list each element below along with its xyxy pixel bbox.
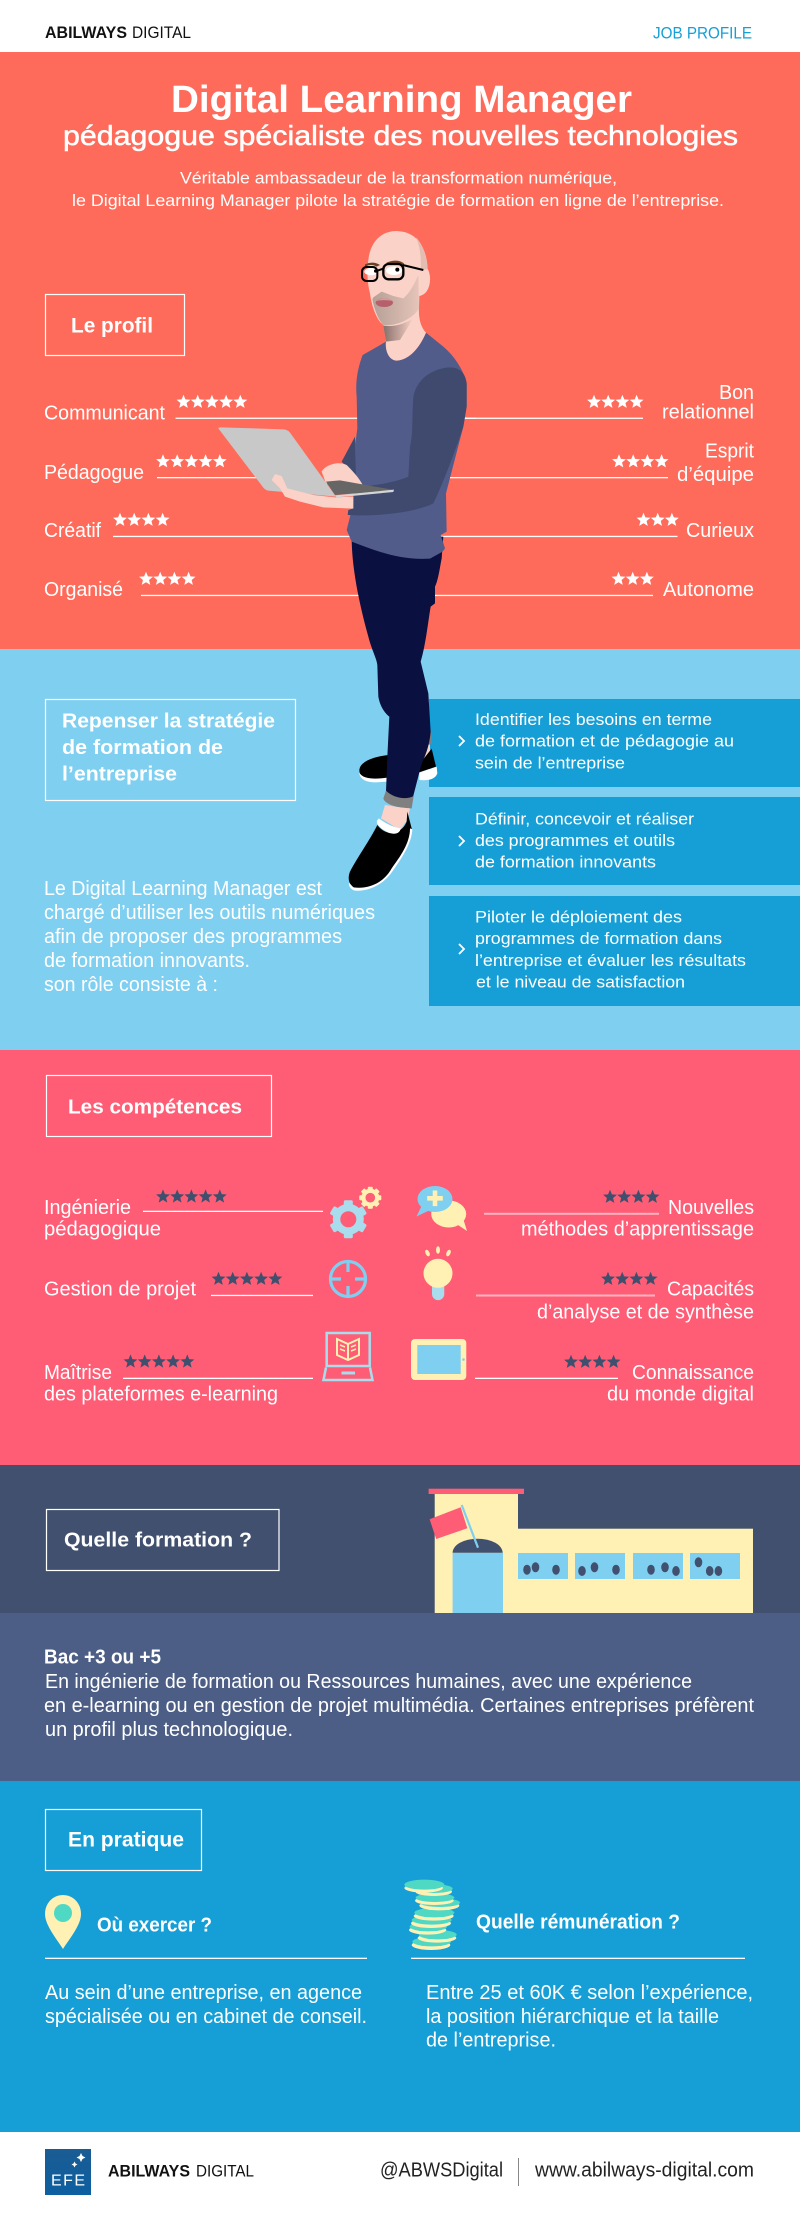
description text: chargé d’utiliser les outils numériques	[44, 902, 375, 924]
role box 1: sein de l’entreprise	[475, 753, 625, 772]
skill: capacites d'analyse	[476, 1272, 754, 1323]
torso, head and laptop	[218, 231, 467, 559]
text: remuneration: de l’entreprise.	[426, 2030, 556, 2052]
skill: nouvelles methodes: Nouvelles	[668, 1197, 754, 1219]
rating: autonome	[400, 572, 754, 601]
rating: creatif	[44, 513, 413, 542]
twitter handle: @ABWSDigital	[380, 2160, 503, 2182]
rating: bon relationnel	[400, 382, 754, 424]
panel: en pratique	[0, 1781, 800, 2132]
intro text: Véritable ambassadeur de la transformation numérique,	[180, 168, 617, 188]
skill: ingenierie pedagogique: Ingénierie	[44, 1197, 131, 1219]
rating: creatif: Créatif	[44, 520, 101, 542]
icon: laptop with book	[324, 1333, 372, 1380]
skill: ingenierie pedagogique	[44, 1189, 323, 1240]
role box 3	[429, 896, 800, 1006]
panel: quelle formation	[0, 1465, 800, 1613]
logo: EFE	[45, 2149, 91, 2195]
description text: afin de proposer des programmes	[44, 926, 342, 948]
role box 2: de formation innovants	[475, 852, 656, 871]
heading box: de formation de	[62, 737, 223, 759]
heading box: l’entreprise	[62, 764, 177, 786]
subtitle: pédagogue spécialiste des nouvelles technologies	[63, 120, 738, 151]
heading box	[46, 700, 296, 800]
brand logo: ABILWAYS	[45, 23, 127, 42]
description text: en e-learning ou en gestion de projet multimédia. Certaines entreprises préfèrent	[44, 1695, 754, 1717]
description text: de formation innovants.	[44, 950, 250, 972]
rating: organise	[44, 572, 421, 601]
heading: en pratique: En pratique	[68, 1829, 184, 1852]
skill: ingenierie pedagogique: pédagogique	[44, 1218, 161, 1240]
icon: tablet	[411, 1339, 466, 1380]
website: www.abilways-digital.com	[534, 2160, 754, 2182]
panel: les competences	[0, 1050, 800, 1465]
role box 3: programmes de formation dans	[475, 929, 722, 948]
brand name	[108, 2162, 254, 2181]
description text: son rôle consiste à :	[44, 974, 218, 996]
brand logo: DIGITAL	[132, 23, 191, 42]
rating: organise: Organisé	[44, 579, 123, 601]
header bar	[0, 0, 800, 52]
text: remuneration	[426, 1982, 753, 2052]
subheading: quelle remuneration: Quelle rémunération ?	[476, 1912, 680, 1934]
role box 3: Piloter le déploiement des	[475, 907, 682, 926]
intro text	[72, 168, 724, 210]
heading: en pratique	[46, 1810, 202, 1870]
skill: capacites d'analyse: d’analyse et de synthèse	[537, 1301, 754, 1323]
skill: maitrise des plateformes: des plateformes e-learning	[44, 1384, 278, 1406]
text: ou exercer: Au sein d’une entreprise, en agence	[45, 1982, 362, 2004]
heading: le profil: Le profil	[71, 314, 153, 338]
footer	[0, 2132, 800, 2216]
brand logo	[45, 23, 191, 42]
skill: nouvelles methodes: méthodes d’apprentissage	[521, 1218, 754, 1240]
icon: gears	[330, 1187, 381, 1238]
role box 2: des programmes et outils	[475, 831, 675, 850]
heading: les competences	[46, 1076, 272, 1136]
skill: connaissance du monde digital: Connaissance	[632, 1362, 754, 1384]
description text	[44, 878, 375, 996]
heading: quelle formation: Quelle formation ?	[64, 1530, 252, 1552]
panel: le profil	[0, 52, 800, 649]
rating: autonome: Autonome	[663, 579, 754, 601]
role box 3: l’entreprise et évaluer les résultats	[475, 951, 746, 970]
rating: bon relationnel: Bon	[719, 382, 754, 404]
role box 2: Définir, concevoir et réaliser	[475, 809, 694, 828]
subheading: ou exercer: Où exercer ?	[97, 1915, 212, 1937]
text: remuneration: la position hiérarchique et la taille	[426, 2006, 719, 2028]
role box 3: et le niveau de satisfaction	[476, 972, 685, 991]
rating: pedagogue	[44, 454, 307, 484]
panel: repenser la strategie	[0, 649, 800, 1050]
description text: Le Digital Learning Manager est	[44, 878, 322, 900]
icon: target	[330, 1262, 366, 1296]
icon: speech bubbles	[416, 1186, 467, 1231]
skill: gestion de projet	[44, 1272, 313, 1301]
illustration: person with laptop	[218, 231, 467, 891]
heading: les competences: Les compétences	[68, 1096, 242, 1118]
text: ou exercer	[45, 1982, 367, 2028]
rating: esprit d'equipe	[400, 440, 754, 486]
job profile label: JOB PROFILE	[653, 24, 752, 42]
rating: communicant: Communicant	[44, 402, 165, 424]
skill: connaissance du monde digital: du monde digital	[607, 1384, 754, 1406]
intro text: le Digital Learning Manager pilote la stratégie de formation en ligne de l’entreprise.	[72, 191, 724, 210]
heading box: Repenser la stratégie	[62, 711, 275, 733]
rating: curieux: Curieux	[686, 520, 754, 542]
description text: un profil plus technologique.	[45, 1719, 293, 1741]
role box 1: de formation et de pédagogie au	[475, 732, 734, 751]
rating: bon relationnel: relationnel	[662, 402, 754, 424]
icon: coin stack	[404, 1880, 460, 1950]
panel: bac text	[0, 1613, 800, 1781]
illustration: school building	[429, 1489, 753, 1613]
heading: le profil	[46, 294, 184, 356]
rating: curieux	[400, 513, 754, 542]
logo: EFE: EFE	[51, 2172, 85, 2190]
description text	[44, 1671, 754, 1741]
rating: esprit d'equipe: d’équipe	[677, 464, 754, 486]
text: remuneration: Entre 25 et 60K € selon l’expérience,	[426, 1982, 753, 2004]
icon: map pin	[45, 1895, 81, 1949]
rating: pedagogue: Pédagogue	[44, 462, 144, 484]
legs and shoes	[349, 537, 443, 891]
role box 1: Identifier les besoins en terme	[475, 710, 712, 729]
skill: connaissance du monde digital	[475, 1355, 754, 1406]
skill: maitrise des plateformes: Maîtrise	[44, 1362, 112, 1384]
brand name: DIGITAL	[196, 2162, 254, 2181]
diploma requirement: Bac +3 ou +5	[44, 1647, 161, 1669]
skill: nouvelles methodes	[484, 1190, 754, 1240]
skill: maitrise des plateformes	[44, 1354, 313, 1406]
heading: quelle formation	[46, 1510, 279, 1570]
skill: capacites d'analyse: Capacités	[667, 1279, 754, 1301]
text: ou exercer: spécialisée ou en cabinet de conseil.	[45, 2006, 367, 2028]
title: Digital Learning Manager	[171, 79, 632, 121]
description text: En ingénierie de formation ou Ressources humaines, avec une expérience	[45, 1671, 692, 1693]
rating: communicant	[44, 395, 476, 424]
icon: lightbulb	[424, 1246, 452, 1300]
role box 1	[429, 699, 800, 787]
skill: gestion de projet: Gestion de projet	[44, 1279, 196, 1301]
brand name: ABILWAYS	[108, 2162, 190, 2181]
role box 2	[429, 797, 800, 885]
rating: esprit d'equipe: Esprit	[705, 440, 754, 462]
